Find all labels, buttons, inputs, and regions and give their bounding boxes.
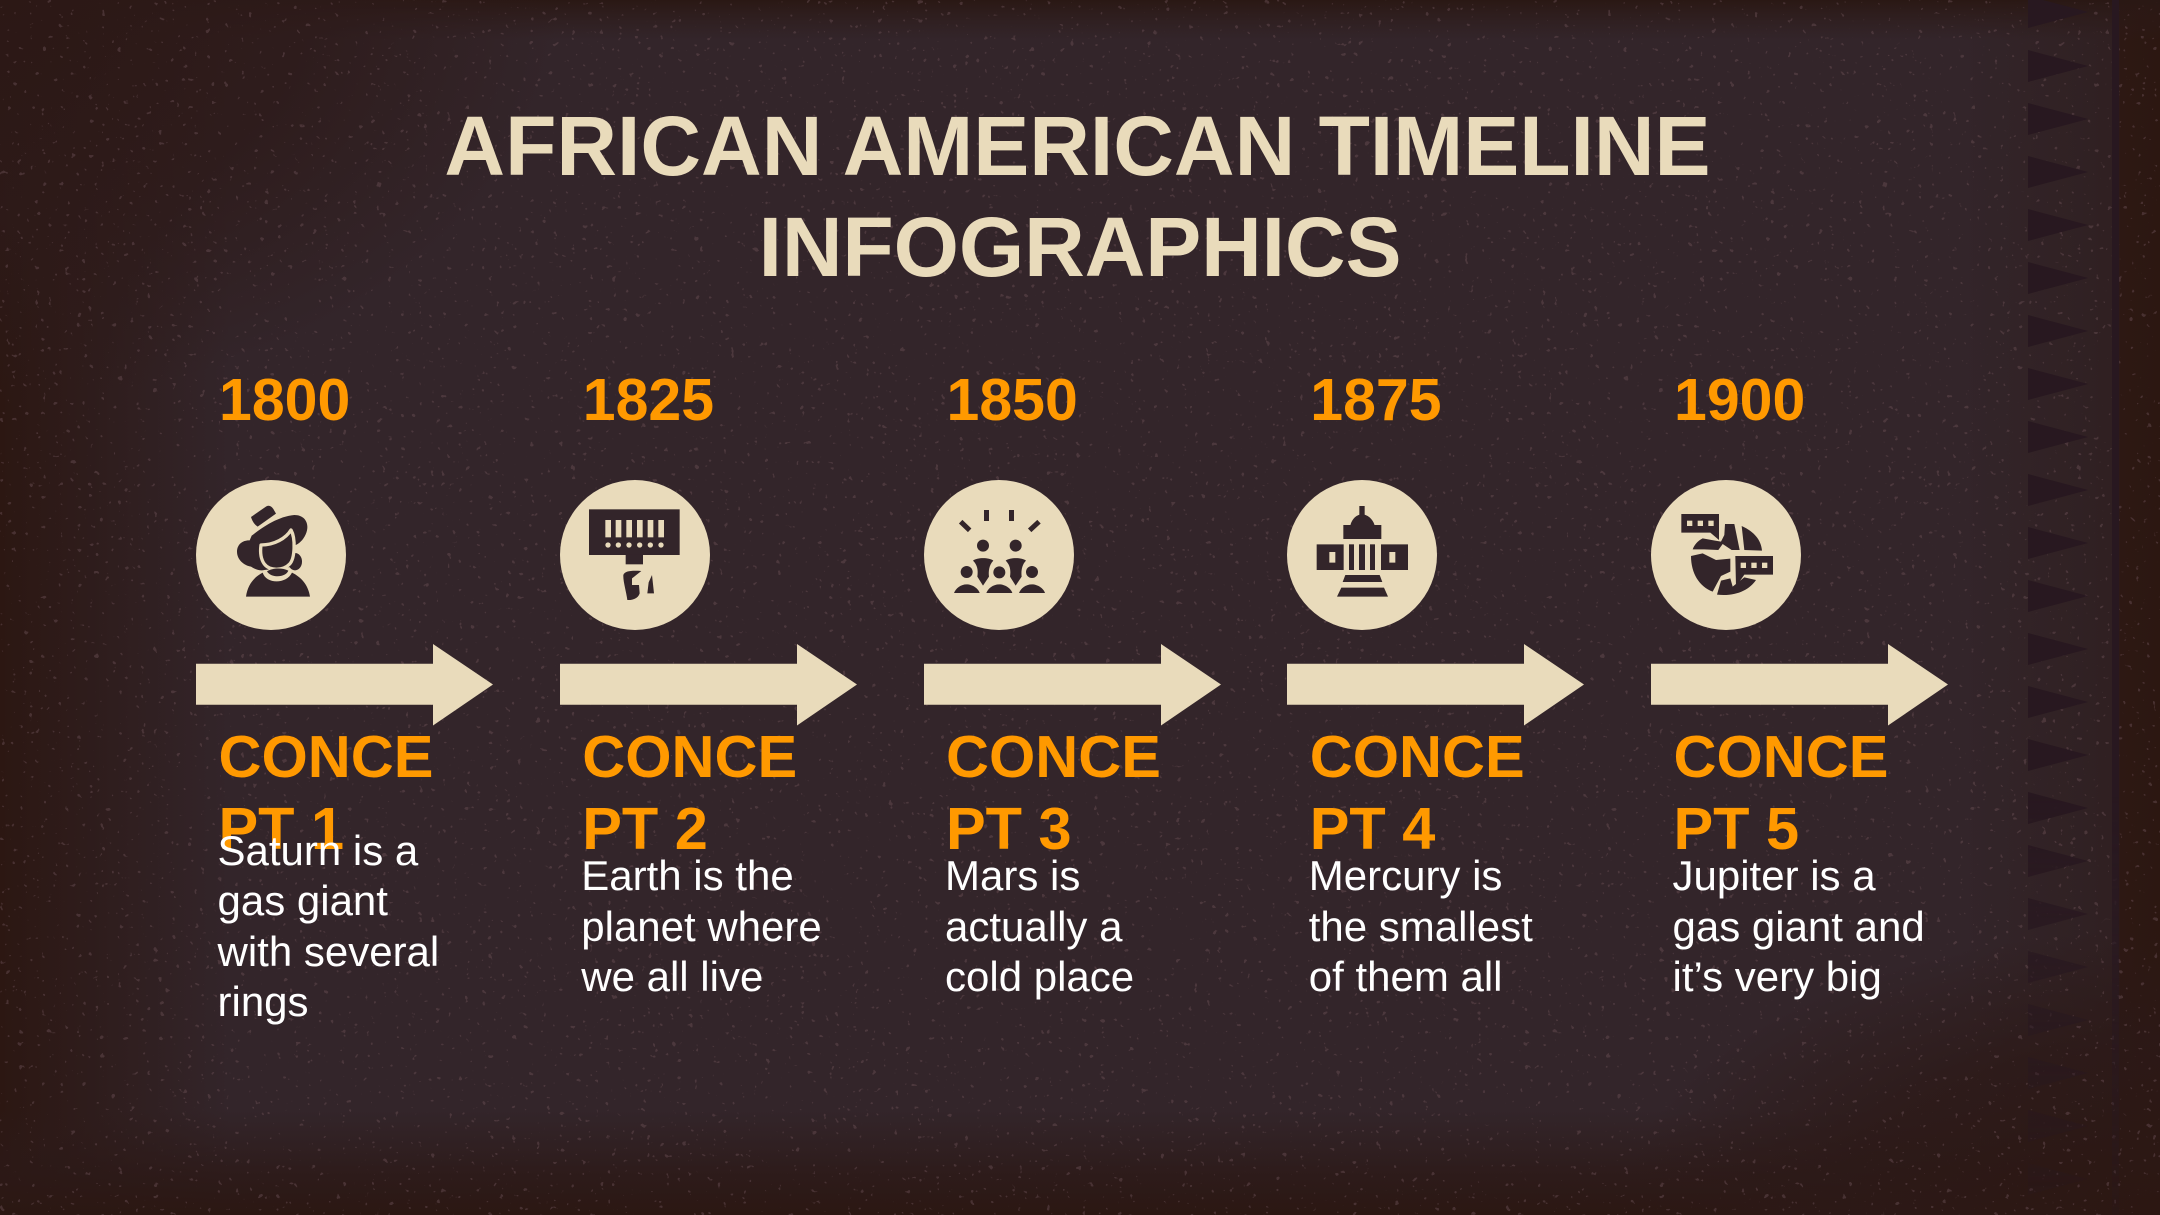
description: Jupiter: it’s very big xyxy=(1672,953,1882,1000)
description: Jupiter: gas giant and xyxy=(1672,903,1925,950)
heading: concept 2: PT 2 xyxy=(582,795,708,862)
description: Earth: Earth is the xyxy=(581,852,794,899)
description: Mercury xyxy=(1309,852,1533,1000)
heading: concept 4: PT 4 xyxy=(1310,795,1435,862)
title: AFRICAN AMERICAN TIMELINE xyxy=(444,99,1711,193)
description: Earth: planet where xyxy=(581,903,822,950)
timeline item 2: 1825 xyxy=(560,367,857,1000)
heading: concept 4: CONCE xyxy=(1310,723,1525,790)
timeline item 1: 1800 xyxy=(196,367,493,1025)
description: Saturn: Saturn is a xyxy=(218,827,418,874)
heading: concept 3: CONCE xyxy=(946,723,1161,790)
description: Earth: we all live xyxy=(581,953,763,1000)
arrow 2 xyxy=(560,644,857,726)
year 1825: 1825 xyxy=(583,367,714,433)
timeline item 4: 1875 xyxy=(1287,367,1584,1000)
description: Saturn: with several xyxy=(218,928,439,975)
year 1800: 1800 xyxy=(219,367,350,433)
heading: concept 1: CONCE xyxy=(218,723,433,790)
title: INFOGRAPHICS xyxy=(759,200,1401,294)
timeline item 3: 1850 xyxy=(924,367,1221,1000)
heading: concept 2: CONCE xyxy=(582,723,797,790)
description: Mercury: Mercury is xyxy=(1309,852,1502,899)
timeline item 5: 1900 xyxy=(1651,367,1948,1000)
description: Jupiter: Jupiter is a xyxy=(1672,852,1876,899)
year 1900: 1900 xyxy=(1674,367,1805,433)
heading: concept 3 xyxy=(946,723,1161,862)
description: Saturn xyxy=(217,827,439,1025)
arrow 4 xyxy=(1287,644,1584,726)
arrow 3 xyxy=(924,644,1221,726)
description: Mars: Mars is xyxy=(945,852,1080,899)
heading: concept 4 xyxy=(1310,723,1525,862)
heading: concept 1 xyxy=(218,723,433,862)
year 1850: 1850 xyxy=(946,367,1078,433)
description: Saturn: gas giant xyxy=(218,877,388,924)
heading: concept 5 xyxy=(1674,723,1888,862)
title xyxy=(444,99,1711,294)
description: Mercury: of them all xyxy=(1309,953,1503,1000)
icon: globe with speech bubbles xyxy=(1651,480,1801,630)
icon: crowd xyxy=(924,480,1074,630)
description: Mars: actually a xyxy=(945,903,1122,950)
description: Mars xyxy=(945,852,1134,1000)
description: Mars: cold place xyxy=(945,953,1134,1000)
icon: protest sign xyxy=(560,480,710,630)
heading: concept 2 xyxy=(582,723,797,862)
description: Mercury: the smallest xyxy=(1309,903,1533,950)
icon: capitol building xyxy=(1287,480,1437,630)
description: Earth xyxy=(581,852,822,1000)
icon: woman with hat xyxy=(196,480,346,630)
description: Jupiter xyxy=(1672,852,1925,1000)
year 1875: 1875 xyxy=(1310,367,1442,433)
heading: concept 5: PT 5 xyxy=(1674,795,1799,862)
heading: concept 5: CONCE xyxy=(1674,723,1888,790)
description: Saturn: rings xyxy=(218,978,309,1025)
arrow 5 xyxy=(1651,644,1948,726)
heading: concept 3: PT 3 xyxy=(946,795,1072,862)
arrow 1 xyxy=(196,644,493,726)
heading: concept 1: PT 1 xyxy=(218,795,344,862)
